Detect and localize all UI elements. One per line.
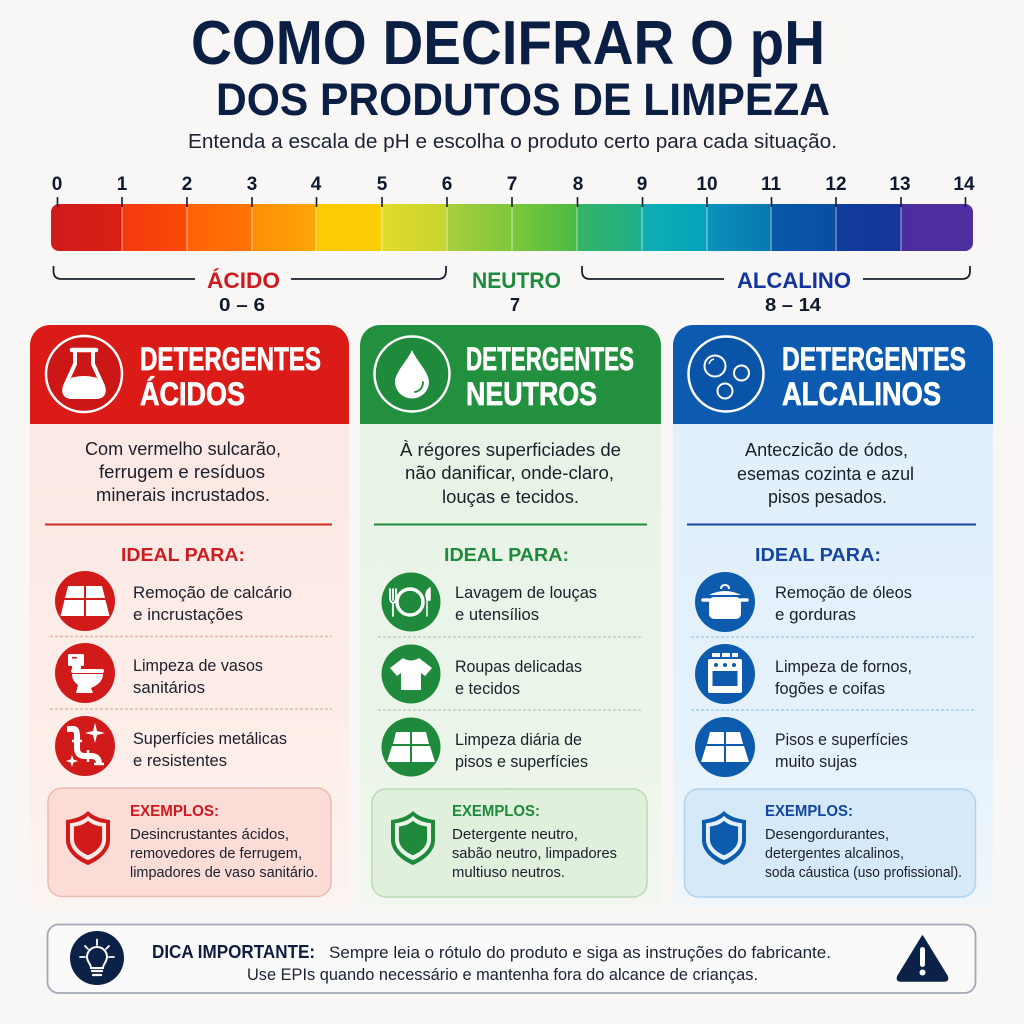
panel: alkaline detergents — [673, 325, 993, 906]
scale numbers: 1 — [117, 174, 128, 195]
item: ovens: fogões e coifas — [775, 679, 885, 698]
range: acid — [54, 266, 446, 315]
item: ovens — [695, 644, 912, 704]
scale numbers: 11 — [761, 174, 781, 195]
scale numbers: 10 — [696, 174, 718, 195]
range: acid: ÁCIDO — [207, 268, 280, 293]
acid examples box: limpadores de vaso sanitário. — [130, 865, 318, 881]
subtitle: Entenda a escala de pH e escolha o produto certo para cada situação. — [188, 131, 837, 153]
item: dishes: Lavagem de louças — [455, 583, 597, 602]
alkaline examples box: Desengordurantes, — [765, 827, 889, 843]
alkaline examples box: soda cáustica (uso profissional). — [765, 865, 962, 881]
title: DOS PRODUTOS DE LIMPEZA — [216, 74, 830, 125]
pH scale — [51, 174, 975, 315]
item: oils: e gorduras — [775, 605, 856, 624]
item: floors: pisos e superfícies — [455, 752, 588, 771]
neutral examples box: sabão neutro, limpadores — [452, 846, 617, 862]
acid examples box: Desincrustantes ácidos, — [130, 827, 289, 843]
neutral description — [400, 440, 621, 507]
item: metal surfaces: e resistentes — [133, 751, 227, 770]
alkaline description — [737, 440, 914, 507]
item: floors: Limpeza diária de — [455, 730, 582, 749]
item: limescale: Remoção de calcário — [133, 583, 292, 602]
alkaline header — [673, 325, 993, 424]
item: clothes: Roupas delicadas — [455, 657, 582, 676]
item: dishes — [382, 572, 597, 632]
title — [191, 9, 830, 125]
range: neutral: NEUTRO — [472, 268, 561, 293]
acid header — [30, 325, 349, 424]
alkaline description: pisos pesados. — [768, 487, 887, 507]
icon: light bulb — [70, 931, 124, 985]
scale numbers: 0 — [52, 174, 62, 195]
scale numbers: 13 — [889, 174, 911, 195]
item: clothes — [382, 644, 582, 704]
item: oils — [695, 572, 912, 632]
item: dirty floors: muito sujas — [775, 752, 857, 771]
range: alkaline: 8 – 14 — [765, 295, 821, 315]
neutral examples box — [372, 789, 647, 897]
scale numbers: 14 — [953, 174, 975, 195]
alkaline description: Anteczicão de ódos, — [745, 440, 908, 460]
alkaline examples box: detergentes alcalinos, — [765, 846, 904, 862]
colour bar — [51, 197, 973, 251]
scale numbers: 7 — [507, 174, 517, 195]
item: ovens: Limpeza de fornos, — [775, 657, 912, 676]
panel: acid detergents — [30, 325, 349, 906]
neutral examples box: Detergente neutro, — [452, 827, 578, 843]
item: dirty floors: Pisos e superfícies — [775, 730, 908, 749]
alkaline header: DETERGENTES — [782, 341, 966, 377]
acid header: ÁCIDOS — [140, 376, 245, 412]
tip banner — [48, 924, 976, 993]
range: acid: 0 – 6 — [219, 295, 265, 315]
item: metal surfaces: Superfícies metálicas — [133, 729, 287, 748]
item: limescale — [55, 571, 292, 631]
neutral description: À régores superficiades de — [400, 440, 621, 460]
item: dirty floors — [695, 717, 908, 777]
range: neutral — [472, 268, 561, 315]
acid examples box — [48, 788, 331, 896]
item: metal surfaces — [55, 716, 287, 776]
neutral examples box: multiuso neutros. — [452, 865, 565, 881]
acid examples box: EXEMPLOS: — [130, 803, 219, 820]
range: neutral: 7 — [510, 295, 520, 315]
item: toilets — [55, 643, 263, 703]
tip text — [152, 942, 831, 984]
item: dishes: e utensílios — [455, 605, 539, 624]
neutral header: DETERGENTES — [466, 341, 634, 377]
panel: neutral detergents — [360, 325, 661, 906]
scale numbers: 9 — [637, 174, 647, 195]
scale numbers: 6 — [442, 174, 452, 195]
icon: warning triangle — [897, 936, 948, 981]
item: oils: Remoção de óleos — [775, 583, 912, 602]
item: limescale: e incrustações — [133, 605, 243, 624]
scale numbers: 12 — [825, 174, 847, 195]
acid ideal heading: IDEAL PARA: — [121, 545, 245, 565]
tip text: DICA IMPORTANTE: — [152, 942, 315, 962]
item: toilets: sanitários — [133, 678, 205, 697]
alkaline header: ALCALINOS — [782, 376, 941, 412]
acid description: Com vermelho sulcarão, — [85, 439, 281, 459]
acid examples box: removedores de ferrugem, — [130, 846, 302, 862]
neutral header: NEUTROS — [466, 376, 597, 412]
neutral header — [360, 325, 661, 424]
item: clothes: e tecidos — [455, 679, 520, 698]
tip text: Sempre leia o rótulo do produto e siga as instruções do fabricante. — [329, 943, 831, 962]
scale numbers: 8 — [573, 174, 583, 195]
scale numbers: 2 — [182, 174, 192, 195]
alkaline examples box — [684, 789, 976, 897]
alkaline description: esemas cozinta e azul — [737, 464, 914, 484]
scale numbers: 3 — [247, 174, 257, 195]
alkaline ideal heading: IDEAL PARA: — [755, 545, 881, 565]
tip text: Use EPIs quando necessário e mantenha fora do alcance de crianças. — [247, 965, 758, 984]
item: floors — [382, 718, 588, 776]
acid header: DETERGENTES — [140, 341, 321, 377]
neutral description: louças e tecidos. — [442, 487, 579, 507]
scale numbers: 4 — [311, 174, 322, 195]
range: alkaline — [582, 266, 970, 315]
neutral examples box: EXEMPLOS: — [452, 803, 540, 820]
acid description: minerais incrustados. — [96, 485, 270, 505]
neutral description: não danificar, onde-claro, — [405, 463, 614, 483]
item: toilets: Limpeza de vasos — [133, 656, 263, 675]
range: alkaline: ALCALINO — [737, 268, 851, 293]
title: COMO DECIFRAR O pH — [191, 9, 825, 78]
alkaline examples box: EXEMPLOS: — [765, 803, 853, 820]
neutral ideal heading: IDEAL PARA: — [444, 545, 569, 565]
scale numbers — [52, 174, 975, 195]
scale numbers: 5 — [377, 174, 388, 195]
acid description — [85, 439, 281, 505]
acid description: ferrugem e resíduos — [99, 462, 265, 482]
